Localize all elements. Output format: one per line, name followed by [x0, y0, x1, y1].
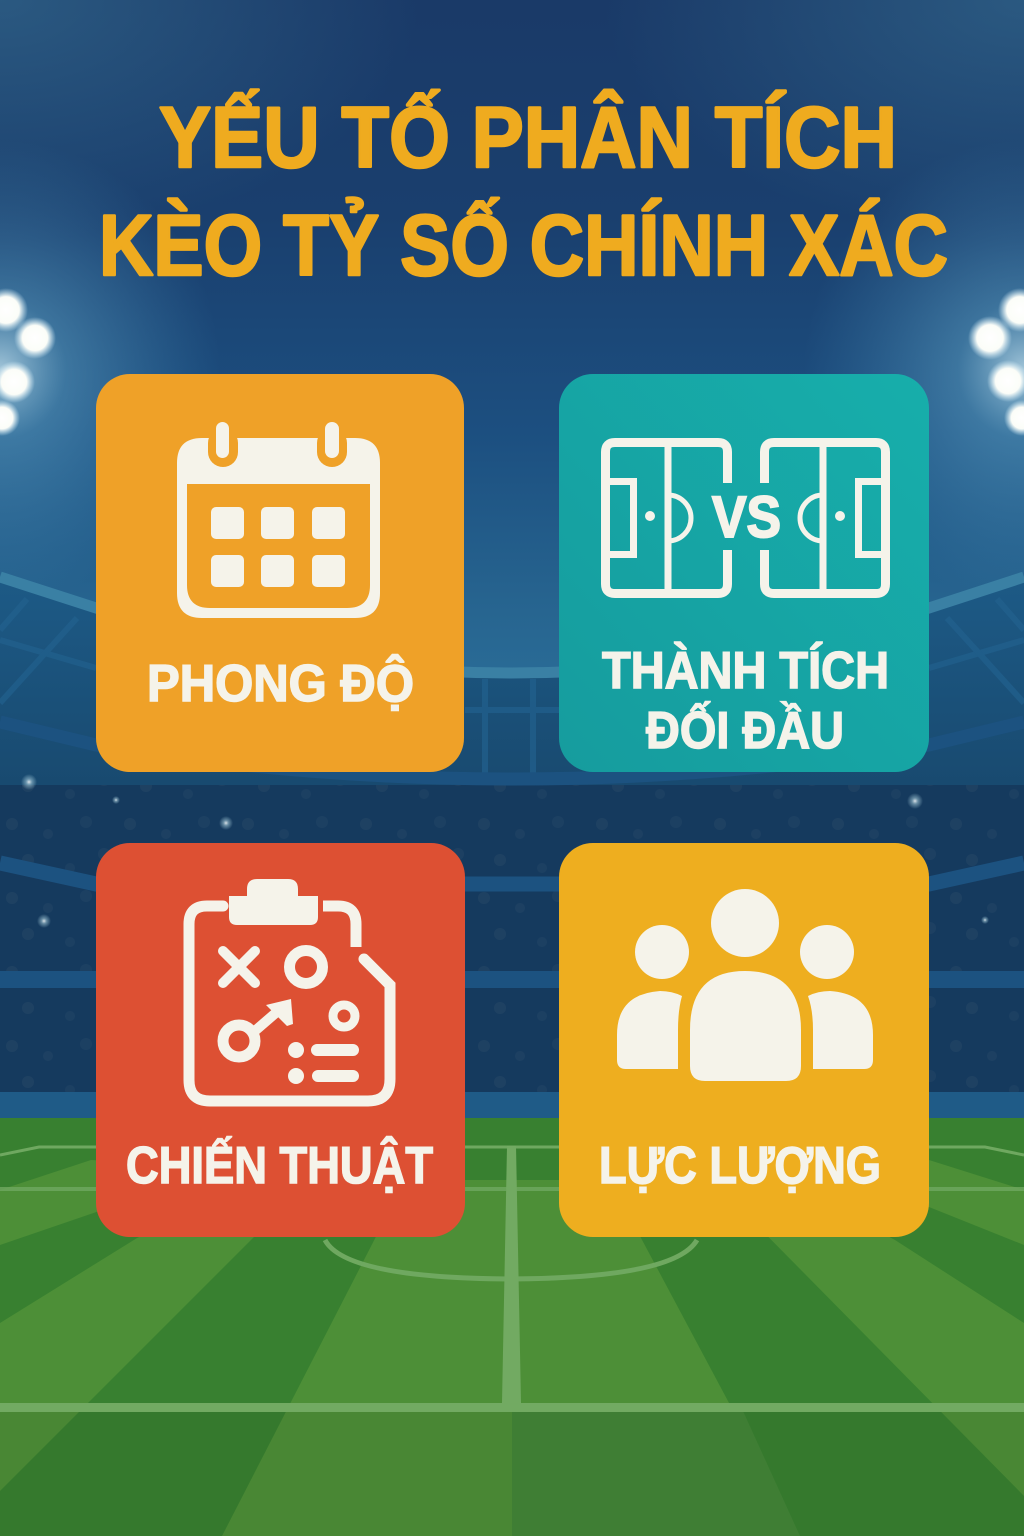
right floodlights	[968, 288, 1024, 436]
left floodlights	[0, 288, 56, 436]
decorative stadium lights in crowd	[21, 774, 989, 928]
label: phong do: PHONG ĐỘ	[147, 654, 414, 713]
title	[99, 90, 948, 294]
title: YẾU TỐ PHÂN TÍCH	[159, 90, 897, 186]
panel: chien thuat	[96, 843, 465, 1237]
background: stands and crowd	[0, 577, 1024, 1120]
football pitch	[0, 1118, 1024, 1536]
panel: luc luong	[559, 843, 929, 1237]
icon: calendar	[177, 422, 380, 618]
label: thanh tich doi dau: ĐỐI ĐẦU	[646, 701, 844, 760]
label: thanh tich doi dau	[602, 642, 889, 760]
icon: tactics clipboard	[189, 879, 390, 1101]
icon: two pitches versus: VS	[712, 485, 781, 550]
label: chien thuat: CHIẾN THUẬT	[126, 1136, 433, 1195]
icon: two pitches versus	[606, 442, 886, 594]
background: stadium sky	[0, 0, 1024, 720]
icon: team of three people	[617, 889, 873, 1081]
label: luc luong: LỰC LƯỢNG	[599, 1137, 881, 1195]
label: thanh tich doi dau: THÀNH TÍCH	[602, 642, 889, 700]
panel: thanh tich doi dau	[559, 374, 929, 772]
panel: phong do	[96, 374, 464, 772]
